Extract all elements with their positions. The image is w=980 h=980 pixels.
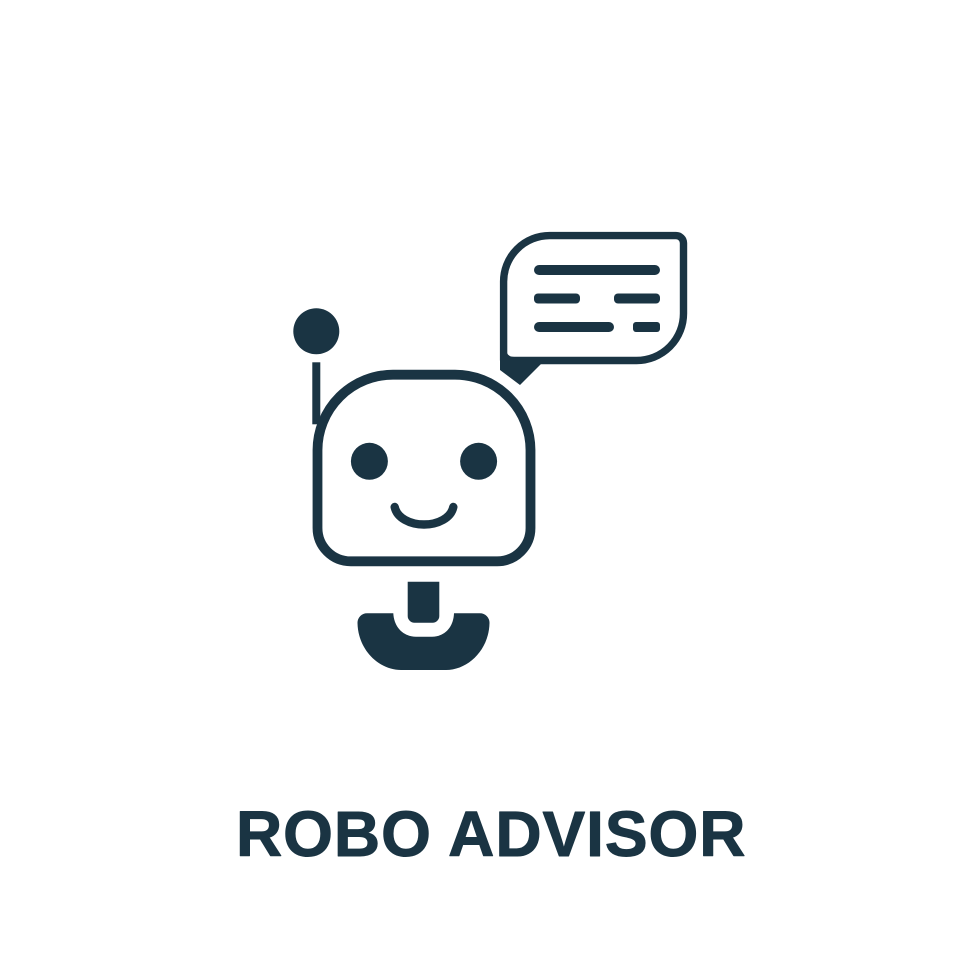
text lines in bubble [534,265,660,332]
title: ROBO ADVISOR [236,798,746,870]
robot neck [408,582,439,623]
robot eyes [351,443,497,480]
robot head [318,375,530,561]
icon: robo advisor [293,236,684,670]
bubble tail [500,352,546,385]
icon: antenna [293,308,339,424]
robot smile [395,507,453,524]
bubble outline [504,236,684,360]
robot base [357,613,490,670]
icon: speech bubble [500,236,684,385]
